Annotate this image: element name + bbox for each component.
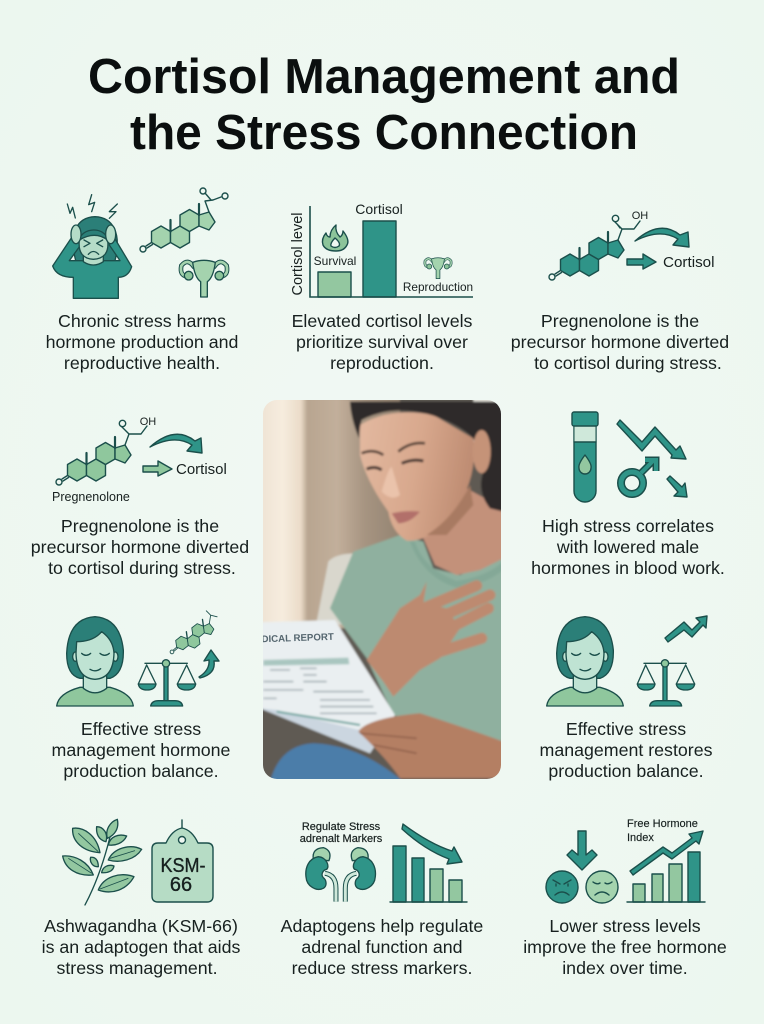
icon: pregnenolone molecule: Cortisol [176, 461, 227, 478]
panel: pregnenolone left: to cortisol during stress. [48, 558, 236, 578]
panel: stress management left: production balance. [63, 761, 219, 781]
panel: stress management right [540, 616, 713, 781]
bar chart: Reproduction [403, 280, 473, 294]
title: the Stress Connection [130, 106, 638, 160]
bar chart: rising index: Index [627, 832, 654, 844]
bar chart: rising index [627, 818, 705, 902]
icon: blood test tube [572, 412, 598, 502]
bar chart: falling markers [390, 824, 467, 902]
icon: uterus [181, 260, 227, 297]
icon: steroid molecule [140, 188, 228, 252]
icon: small down arrow [667, 476, 687, 497]
text: Adaptogens help regulate [281, 916, 483, 936]
icon: small molecule [165, 609, 221, 654]
panel: pregnenolone left: precursor hormone diverted [31, 537, 249, 557]
panel: adaptogens [281, 821, 483, 978]
label: regulate stress [300, 821, 383, 845]
icon: angry face [546, 871, 578, 903]
label: regulate stress: adrenalt Markers [300, 833, 383, 845]
photo: woman reading medical report: DICAL REPORT [261, 632, 334, 645]
panel: adaptogens: adrenal function and [301, 937, 463, 957]
icon: pregnenolone molecule [52, 416, 227, 504]
title: Cortisol Management and [88, 50, 680, 104]
icon: down arrow [567, 831, 597, 870]
panel: stress management right: management restores [540, 740, 713, 760]
panel: pregnenolone left [31, 416, 249, 578]
bar chart: Cortisol level [290, 212, 306, 296]
panel: elevated cortisol [290, 201, 473, 373]
icon: calm person [547, 617, 623, 706]
panel: ashwagandha [42, 819, 240, 978]
text: Ashwagandha (KSM-66) [44, 916, 238, 936]
text: Pregnenolone is the [61, 516, 219, 536]
icon: male symbol [621, 460, 656, 494]
icon: stressed person [53, 195, 132, 298]
icon: cortisol molecule: Cortisol [663, 254, 714, 271]
icon: cortisol molecule: OH [632, 210, 648, 222]
panel: stress management left [52, 609, 231, 781]
title [88, 50, 680, 160]
panel: stress management right: production balance. [548, 761, 704, 781]
panel: pregnenolone top right: precursor hormone diverted [511, 332, 729, 352]
panel: adaptogens: reduce stress markers. [292, 958, 472, 978]
panel: chronic stress: reproductive health. [64, 353, 220, 373]
panel: elevated cortisol: prioritize survival over [296, 332, 468, 352]
icon: pregnenolone molecule: Pregnenolone [52, 490, 130, 504]
text: Pregnenolone is the [541, 311, 699, 331]
icon: cortisol molecule [549, 210, 714, 280]
icon: KSM-66 tag [152, 820, 213, 902]
icon: sad calm face [586, 871, 618, 903]
icon: KSM-66 tag: 66 [170, 874, 192, 896]
panel: male hormones [531, 412, 725, 578]
label: regulate stress: Regulate Stress [302, 821, 381, 833]
panel: male hormones: with lowered male [556, 537, 699, 557]
text: Effective stress [566, 719, 686, 739]
icon: curved up arrow [199, 650, 219, 678]
bar chart: Survival [314, 254, 356, 268]
text: Chronic stress harms [58, 311, 226, 331]
panel: chronic stress: hormone production and [46, 332, 238, 352]
text: Effective stress [81, 719, 201, 739]
icon: herb branch [63, 819, 142, 905]
icon: calm person [57, 617, 133, 706]
icon: KSM-66 tag: KSM- [160, 855, 206, 877]
panel: free hormone index [523, 818, 727, 978]
icon: balance scale [637, 660, 695, 706]
text: High stress correlates [542, 516, 714, 536]
panel: pregnenolone top right: to cortisol during stress. [534, 353, 722, 373]
panel: ashwagandha: stress management. [56, 958, 218, 978]
bar chart [290, 201, 473, 297]
bar chart: Cortisol [355, 201, 403, 217]
bar chart: rising index: Free Hormone [627, 818, 698, 830]
icon: kidneys [306, 848, 375, 902]
panel: chronic stress [46, 188, 238, 373]
text: Elevated cortisol levels [292, 311, 473, 331]
panel: stress management left: management hormone [52, 740, 231, 760]
icon: pregnenolone molecule: OH [140, 416, 156, 428]
panel: elevated cortisol: reproduction. [330, 353, 434, 373]
photo: woman reading medical report [260, 395, 507, 785]
panel: ashwagandha: is an adaptogen that aids [42, 937, 240, 957]
icon: downward zigzag arrow [617, 420, 686, 459]
icon: upward zigzag arrow [665, 616, 707, 642]
icon: balance scale [138, 660, 196, 706]
text: Lower stress levels [549, 916, 701, 936]
panel: male hormones: hormones in blood work. [531, 558, 725, 578]
panel: pregnenolone top right [511, 210, 729, 373]
panel: free hormone index: index over time. [562, 958, 688, 978]
panel: free hormone index: improve the free hormone [523, 937, 727, 957]
